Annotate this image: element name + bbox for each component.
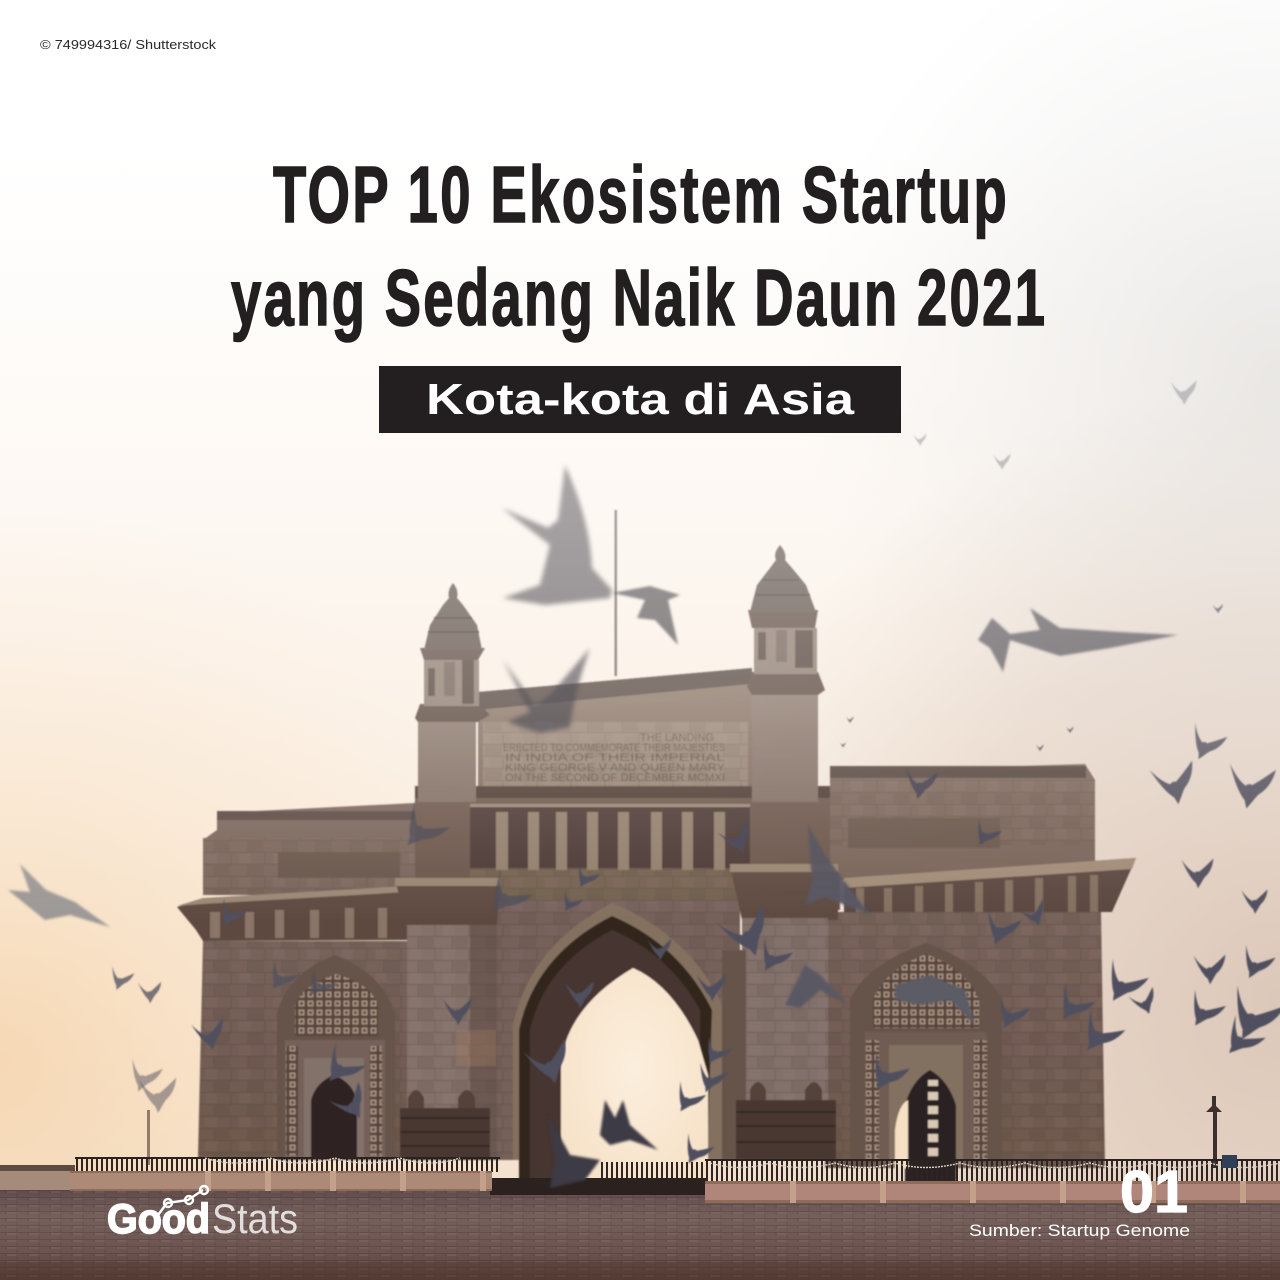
inscription: ON THE SECOND OF DECEMBER MCMXI	[505, 772, 725, 784]
icon: rising line chart	[158, 1186, 208, 1215]
photo credit: © 749994316/ Shutterstock	[40, 38, 217, 52]
bird: large top pigeon	[502, 465, 612, 605]
inscription: ERECTED TO COMMEMORATE THEIR MAJESTIES	[503, 742, 725, 754]
distant lamp post	[1206, 1096, 1222, 1168]
logo: GoodStats: Good	[107, 1195, 210, 1242]
birds: pigeons in flight, fading into haze	[8, 380, 1280, 1188]
logo: GoodStats	[107, 1186, 298, 1242]
title: yang Sedang Naik Daun 2021	[231, 254, 1045, 343]
left tower	[415, 583, 490, 802]
left pillar	[395, 878, 500, 1160]
inscription	[503, 732, 726, 784]
central arch	[490, 900, 740, 1190]
inscription: KING GEORGE V AND QUEEN MARY	[505, 762, 726, 774]
subtitle badge	[379, 366, 901, 433]
left plinth wall	[70, 1171, 492, 1191]
subtitle badge: Kota-kota di Asia	[426, 375, 855, 424]
fence and chain	[0, 1155, 1280, 1193]
flagpole	[614, 510, 617, 676]
inscription: THE LANDING	[640, 732, 714, 744]
bird: left pale pigeon	[8, 864, 110, 927]
right wing recess	[850, 943, 1002, 1168]
bird: arch pigeons	[548, 1100, 658, 1188]
right wing	[825, 764, 1136, 1182]
ground: cobbled plaza	[0, 1190, 1280, 1280]
bird: right pigeon in flight	[978, 608, 1178, 672]
left wing recess	[277, 955, 395, 1160]
central section	[415, 668, 840, 910]
bird: pigeon over parapet	[503, 648, 590, 733]
right plinth wall	[705, 1181, 1280, 1203]
birds: small flock	[105, 380, 1280, 1170]
page number: 01	[1120, 1159, 1188, 1225]
inscription: IN INDIA OF THEIR IMPERIAL	[505, 752, 725, 764]
title: TOP 10 Ekosistem Startup	[273, 151, 1007, 240]
dark gate base	[490, 1178, 706, 1195]
right pillar	[722, 864, 838, 1160]
right tower	[747, 545, 825, 802]
monument: Gateway of India, fading into haze	[177, 510, 1136, 1190]
bird: building pigeon group right	[785, 825, 870, 1008]
bird: right window pigeon	[895, 975, 975, 1025]
source: Sumber: Startup Genome	[969, 1221, 1190, 1240]
title	[231, 151, 1045, 343]
far left lamp post	[147, 1110, 150, 1165]
left wing	[177, 803, 415, 1160]
bird: second top pigeon	[612, 586, 680, 645]
logo: GoodStats: Stats	[212, 1195, 298, 1242]
